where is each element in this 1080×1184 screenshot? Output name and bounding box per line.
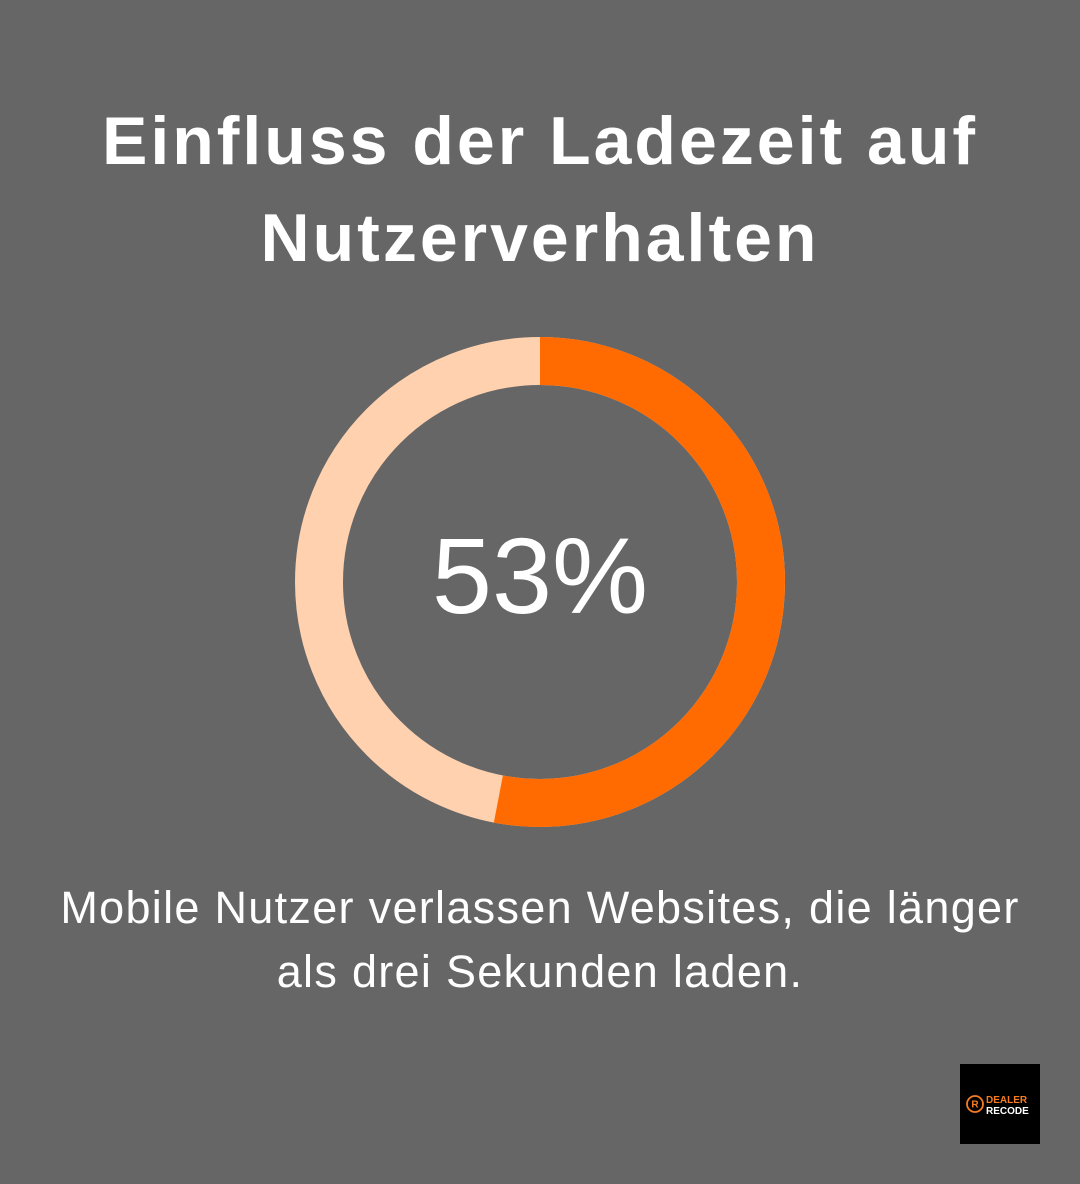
description: Mobile Nutzer verlassen Websites, die länger [60,882,1020,933]
logo: R [971,1100,979,1110]
donut chart: 53% [432,515,648,636]
title: Einfluss der Ladezeit auf [102,103,978,179]
logo: RECODE [986,1106,1029,1117]
title [102,103,978,276]
description: als drei Sekunden laden. [277,946,803,997]
description [60,882,1020,997]
logo: DEALER [986,1095,1028,1106]
logo [960,1064,1040,1144]
title: Nutzerverhalten [261,200,819,276]
